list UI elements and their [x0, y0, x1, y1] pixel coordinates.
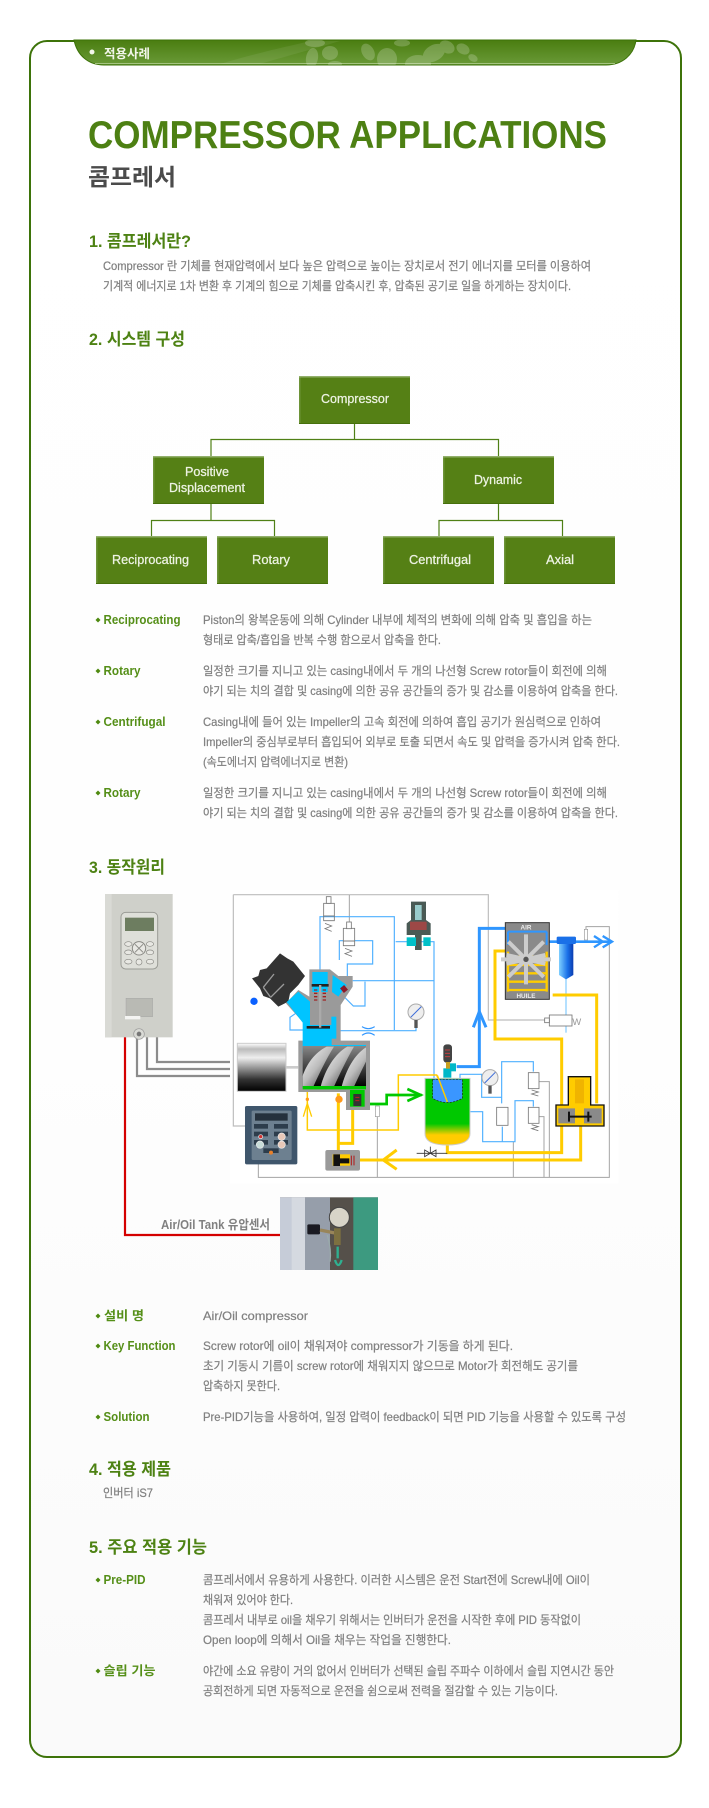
- box: Positive Displacement: [153, 456, 264, 504]
- oil cooler: [501, 923, 551, 1000]
- icon: air filter black block: [250, 953, 305, 1007]
- motor: [237, 1043, 298, 1091]
- item: Pre-PID: Pre-PID: [104, 1573, 146, 1587]
- box: Dynamic: [443, 456, 554, 504]
- box: Positive Displacement: Displacement: [169, 481, 246, 495]
- box: Rotary: [217, 536, 328, 584]
- item: Rotary second: [96, 786, 618, 820]
- item: Reciprocating: Reciprocating: [104, 613, 180, 627]
- item: Rotary second: Rotary: [104, 786, 141, 800]
- item: equipment name: Air/Oil compressor: [203, 1309, 308, 1323]
- heading 5: 5. 주요 적용 기능: [89, 1538, 207, 1557]
- control panel: [245, 1106, 297, 1164]
- pressure regulator: [407, 902, 431, 950]
- banner bullet: [90, 50, 94, 54]
- green line: [370, 1095, 422, 1104]
- control lines: [233, 895, 550, 1126]
- box: Compressor: Compressor: [321, 392, 389, 406]
- heading 4: 4. 적용 제품: [89, 1460, 171, 1479]
- item: equipment name: [96, 1309, 308, 1323]
- text block: definition: [103, 259, 591, 293]
- org chart: [96, 376, 615, 584]
- yellow oil circuit: [338, 951, 597, 1160]
- item: Rotary second: 일정한 크기를 지니고 있는 casing내에서 두 개의 나선형 Screw rotor들이 회전에 의해: [203, 786, 607, 800]
- text block: product: 인버터 iS7: [103, 1486, 153, 1500]
- box: Axial: [504, 536, 615, 584]
- thermal valve: [556, 1077, 604, 1126]
- item: Reciprocating: 형태로 압축/흡입을 반복 수행 함으로서 압축을 한다.: [203, 632, 441, 647]
- wiring: red sensor line: [125, 1037, 280, 1235]
- heading 3: 3. 동작원리: [89, 858, 165, 877]
- item: Rotary second: 야기 되는 치의 결합 및 casing에 의한 공유 공간들의 증가 및 감소를 이용하여 압축을 한다.: [203, 806, 618, 820]
- heading 1: 1. 콤프레서란?: [89, 232, 191, 251]
- blue main line: [457, 928, 507, 1067]
- text block: definition: 기계적 에너지로 1차 변환 후 기계의 힘으로 기체를 압축시킨 후, 압축된 공기로 일을 하게하는 장치이다.: [103, 279, 571, 293]
- oil stop valve: [350, 1090, 365, 1107]
- rotors: [302, 1046, 366, 1087]
- oil cooler: AIR: [521, 924, 532, 931]
- item: Key Function: 압축하지 못한다.: [203, 1379, 280, 1393]
- item: Centrifugal: Casing내에 들어 있는 Impeller의 고속 회전에 의하여 흡입 공기가 원심력으로 인하여: [203, 715, 601, 729]
- box: Compressor: [299, 376, 410, 424]
- item: Centrifugal: (속도에너지 압력에너지로 변환): [203, 755, 348, 769]
- item: Key Function: 초기 기동시 기름이 screw rotor에 채워지지 않으므로 Motor가 회전해도 공기를: [203, 1359, 578, 1373]
- oil tank: [425, 1075, 470, 1145]
- item: sleep function: 공회전하게 되면 자동적으로 운전을 쉼으로써 전력을 절감할 수 있는 기능이다.: [203, 1684, 558, 1698]
- compressor housing: [286, 969, 374, 1110]
- item: Pre-PID: 콤프레서에서 유용하게 사용한다. 이러한 시스템은 운전 Start전에 Screw내에 Oil이: [203, 1573, 590, 1587]
- item: Centrifugal: Impeller의 중심부로부터 흡입되어 외부로 토출 되면서 속도 및 압력을 증가시켜 압축 한다.: [203, 735, 620, 749]
- box: Axial: Axial: [546, 553, 574, 567]
- light blue pilot lines: [290, 917, 533, 1142]
- item: Reciprocating: [96, 613, 592, 647]
- box: Reciprocating: Reciprocating: [112, 553, 189, 567]
- item: Pre-PID: 콤프레서 내부로 oil을 채우기 위해서는 인버터가 운전을 시작한 후에 PID 동작없이: [203, 1613, 581, 1627]
- item: Key Function: [96, 1339, 578, 1393]
- definition list: compressor types: [96, 613, 620, 820]
- item: Key Function: Screw rotor에 oil이 채워져야 compressor가 기동을 하게 된다.: [203, 1339, 513, 1353]
- item: Pre-PID: 채워져 있어야 한다.: [203, 1593, 293, 1607]
- text block: definition: Compressor 란 기체를 현재압력에서 보다 높은 압력으로 높이는 장치로서 전기 에너지를 모터를 이용하여: [103, 259, 591, 273]
- W valve label: W: [572, 1017, 581, 1027]
- item: Rotary: Rotary: [104, 664, 141, 678]
- header banner: [73, 40, 637, 66]
- box: Centrifugal: [383, 536, 494, 584]
- item: equipment name: 설비 명: [104, 1309, 144, 1323]
- banner label: 적용사례: [104, 46, 150, 61]
- box: Dynamic: Dynamic: [474, 473, 522, 487]
- pilot valves: [324, 897, 572, 1131]
- item: Pre-PID: Open loop에 의해서 Oil을 채우는 작업을 진행한다.: [203, 1632, 451, 1647]
- inverter photo: [105, 894, 173, 1039]
- item: sleep function: 슬립 기능: [104, 1663, 156, 1678]
- item: sleep function: [96, 1663, 614, 1698]
- sensor label: Air/Oil Tank 유압센서: [161, 1218, 270, 1232]
- oil stop cylinder: [325, 1150, 360, 1171]
- item: Solution: Solution: [104, 1410, 150, 1424]
- item: Pre-PID: [96, 1573, 590, 1647]
- item: Rotary: 야기 되는 치의 결합 및 casing에 의한 공유 공간들의 증가 및 감소를 이용하여 압축을 한다.: [203, 684, 618, 698]
- box: Reciprocating: [96, 536, 207, 584]
- heading 2: 2. 시스템 구성: [89, 330, 185, 349]
- title: COMPRESSOR APPLICATIONS: [88, 114, 607, 157]
- wiring: gray inverter cables: [137, 1037, 232, 1076]
- drain valve: [417, 1147, 447, 1157]
- gauges: [408, 1004, 498, 1094]
- box: Positive Displacement: Positive: [185, 465, 229, 479]
- relief valve: [443, 1044, 456, 1078]
- oil cooler: HUILE: [516, 993, 535, 1000]
- box: Centrifugal: Centrifugal: [409, 553, 471, 567]
- item: Solution: Pre-PID기능을 사용하여, 일정 압력이 feedback이 되면 PID 기능을 사용할 수 있도록 구성: [203, 1410, 626, 1424]
- restrictor: [362, 1027, 375, 1035]
- compressor schematic: [230, 890, 618, 1183]
- box: Rotary: Rotary: [252, 553, 291, 567]
- definition list: key functions: [96, 1573, 614, 1698]
- item: Key Function: Key Function: [104, 1339, 176, 1353]
- sensor photo: [280, 1197, 378, 1270]
- item: Rotary: 일정한 크기를 지니고 있는 casing내에서 두 개의 나선형 Screw rotor들이 회전에 의해: [203, 664, 607, 678]
- definition list: application: [96, 1309, 626, 1424]
- item: sleep function: 야간에 소요 유량이 거의 없어서 인버터가 선택된 슬립 주파수 이하에서 슬립 지연시간 동안: [203, 1664, 614, 1678]
- item: Centrifugal: [96, 715, 620, 769]
- item: Reciprocating: Piston의 왕복운동에 의해 Cylinder 내부에 체적의 변화에 의해 압축 및 흡입을 하는: [203, 613, 592, 627]
- item: Centrifugal: Centrifugal: [104, 715, 166, 729]
- item: Rotary: [96, 664, 618, 698]
- air filter: [557, 937, 576, 979]
- subtitle: 콤프레서: [88, 164, 176, 190]
